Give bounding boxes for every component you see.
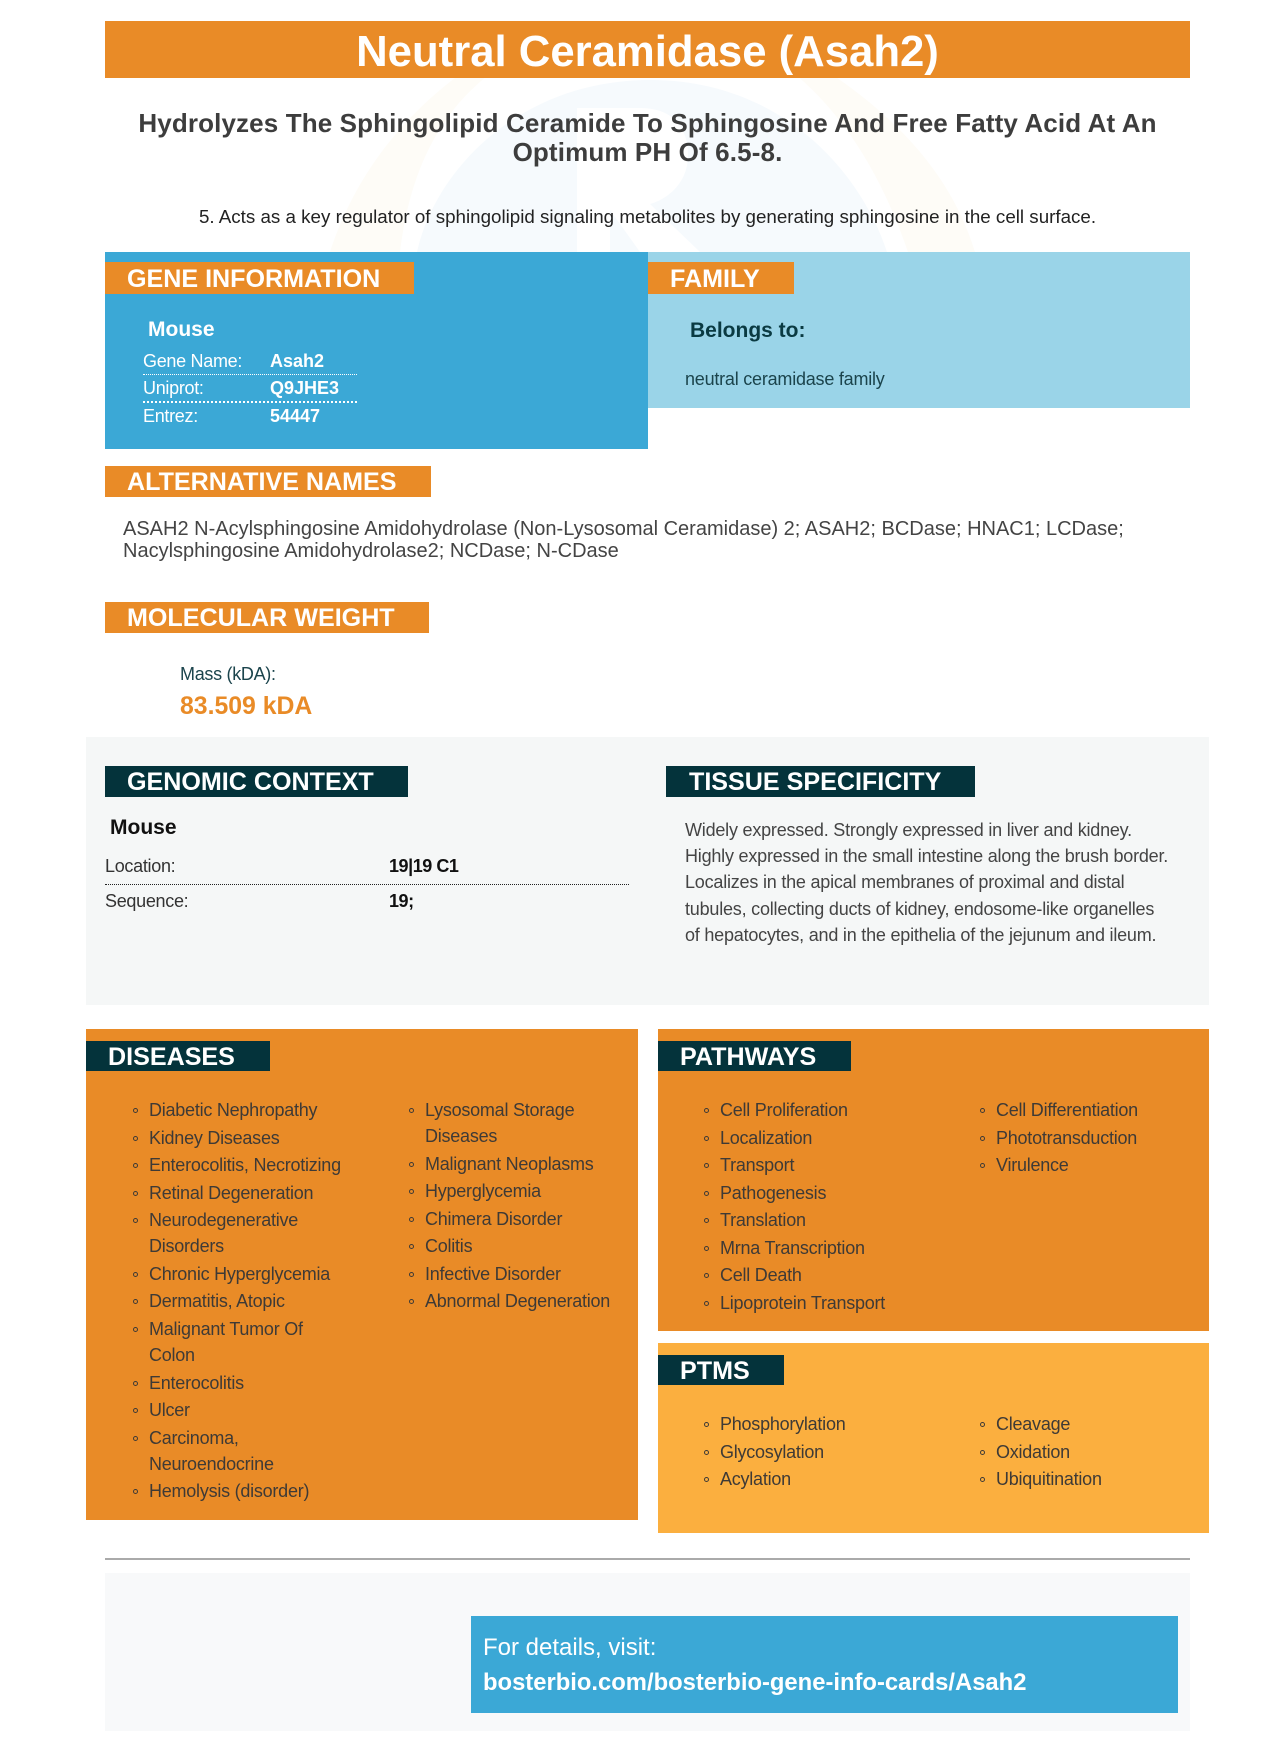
uniprot row [143,376,357,403]
panel: PTMs [658,1343,1209,1533]
diseases list column 2: Abnormal Degeneration [425,1291,610,1311]
panel: family [648,252,1190,408]
pathways list column 1: Translation [720,1210,806,1230]
title banner [105,21,1190,78]
uniprot row: Uniprot: [143,378,204,398]
tissue specificity text: tubules, collecting ducts of kidney, endosome-like organelles [685,899,1154,919]
pathways list column 1: Localization [720,1128,812,1148]
diseases list column 2: Lysosomal Storage [425,1100,574,1120]
belongs to label: Belongs to: [690,319,806,342]
background watermark logo [418,80,886,252]
diseases list column 2 [409,1100,610,1311]
diseases list column 1: Retinal Degeneration [149,1183,313,1203]
pathways list column 1: Cell Proliferation [720,1100,848,1120]
diseases list column 1: Diabetic Nephropathy [149,1100,317,1120]
heading: family: FAMILY [670,265,760,293]
heading: tissue specificity: TISSUE SPECIFICITY [689,768,941,796]
PTMs list column 2: Ubiquitination [996,1469,1102,1489]
heading: genomic context: GENOMIC CONTEXT [127,768,374,796]
heading: diseases: DISEASES [108,1043,235,1071]
diseases list column 1: Neurodegenerative [149,1210,298,1230]
pathways list column 1: Mrna Transcription [720,1238,865,1258]
callout: details link [471,1616,1178,1713]
diseases list column 1: Dermatitis, Atopic [149,1291,285,1311]
diseases list column 1: Disorders [149,1236,224,1256]
pathways list column 2: Virulence [996,1155,1069,1175]
diseases list column 2: Infective Disorder [425,1264,561,1284]
diseases list column 1: Chronic Hyperglycemia [149,1264,330,1284]
pathways list column 1: Lipoprotein Transport [720,1293,885,1313]
function description: 5. Acts as a key regulator of sphingolipid signaling metabolites by generating sphingosine in the cell surface. [199,206,1096,227]
PTMs list column 2: Oxidation [996,1442,1070,1462]
pathways list column 1: Pathogenesis [720,1183,826,1203]
diseases list column 1: Enterocolitis, Necrotizing [149,1155,341,1175]
pathways list column 1 [704,1100,886,1313]
heading: family [648,262,794,294]
gene name row: Gene Name: [143,351,242,371]
location row: Location: [105,856,175,876]
species label: Mouse [148,318,215,341]
visit label: For details, visit: [483,1634,656,1661]
diseases list column 1: Enterocolitis [149,1373,244,1393]
heading: pathways: PATHWAYS [680,1043,816,1071]
location row [105,854,629,885]
pathways list column 2: Phototransduction [996,1128,1137,1148]
species label: Mouse [110,816,177,839]
diseases list column 1: Hemolysis (disorder) [149,1481,309,1501]
diseases list column 2: Colitis [425,1236,472,1256]
url: bosterbio.com/bosterbio-gene-info-cards/Asah2 [483,1669,1026,1696]
heading: molecular weight: MOLECULAR WEIGHT [127,604,395,632]
panel: genomic context and tissue specificity [86,737,1209,1004]
diseases list column 1: Neuroendocrine [149,1454,274,1474]
sequence row [105,891,414,911]
panel: alternative names [105,466,1124,562]
diseases list column 1: Carcinoma, [149,1428,239,1448]
entrez row: 54447 [270,406,320,426]
heading: pathways [658,1041,851,1071]
subtitle: Hydrolyzes The Sphingolipid Ceramide To Sphingosine And Free Fatty Acid At An [138,108,1157,138]
panel: molecular weight [105,602,429,720]
gene name row [143,349,357,375]
pathways list column 2 [980,1100,1138,1175]
title banner: Neutral Ceramidase (Asah2) [356,27,939,76]
mass value: 83.509 kDA [180,693,312,720]
panel: gene information [105,252,648,449]
tissue specificity text: Highly expressed in the small intestine along the brush border. [685,846,1168,866]
diseases list column 1: Kidney Diseases [149,1128,279,1148]
gene name row: Asah2 [270,351,324,371]
sequence row: 19; [389,891,414,911]
panel: diseases [86,1029,638,1520]
tissue specificity text: Widely expressed. Strongly expressed in liver and kidney. [685,820,1132,840]
location row: 19|19 C1 [389,856,458,876]
panel: footer [105,1573,1190,1731]
entrez row [143,406,320,426]
subtitle [138,108,1157,167]
PTMs list column 1 [704,1414,846,1489]
heading: alternative names: ALTERNATIVE NAMES [127,468,397,496]
diseases list column 1: Colon [149,1345,195,1365]
mass label: Mass (kDA): [180,664,276,684]
entrez row: Entrez: [143,406,198,426]
pathways list column 2: Cell Differentiation [996,1100,1138,1120]
sequence row: Sequence: [105,891,188,911]
PTMs list column 2: Cleavage [996,1414,1070,1434]
subtitle: Optimum PH Of 6.5-8. [513,137,782,167]
heading: gene information: GENE INFORMATION [127,265,380,293]
tissue specificity text [685,820,1168,945]
pathways list column 1: Cell Death [720,1265,802,1285]
diseases list column 2: Chimera Disorder [425,1209,562,1229]
PTMs list column 2 [980,1414,1102,1489]
tissue specificity text: Localizes in the apical membranes of proximal and distal [685,872,1124,892]
diseases list column 2: Hyperglycemia [425,1181,541,1201]
diseases list column 2: Diseases [425,1126,497,1146]
diseases list column 2: Malignant Neoplasms [425,1154,594,1174]
PTMs list column 1: Glycosylation [720,1442,824,1462]
panel: pathways [658,1029,1209,1331]
heading: diseases [86,1041,270,1071]
uniprot row: Q9JHE3 [270,378,339,398]
diseases list column 1: Ulcer [149,1400,190,1420]
PTMs list column 1: Acylation [720,1469,791,1489]
heading: PTMs [658,1355,784,1385]
PTMs list column 1: Phosphorylation [720,1414,846,1434]
heading: PTMs: PTMS [680,1357,750,1385]
pathways list column 1: Transport [720,1155,794,1175]
family name: neutral ceramidase family [685,369,885,389]
tissue specificity text: of hepatocytes, and in the epithelia of the jejunum and ileum. [685,925,1156,945]
diseases list column 1: Malignant Tumor Of [149,1319,303,1339]
diseases list column 1 [133,1100,341,1501]
alternative names text: ASAH2 N-Acylsphingosine Amidohydrolase (Non-Lysosomal Ceramidase) 2; ASAH2; BCDase; HNAC1; LCDase; [123,518,1124,540]
alternative names text: Nacylsphingosine Amidohydrolase2; NCDase; N-CDase [123,540,619,562]
alternative names text [123,518,1124,562]
